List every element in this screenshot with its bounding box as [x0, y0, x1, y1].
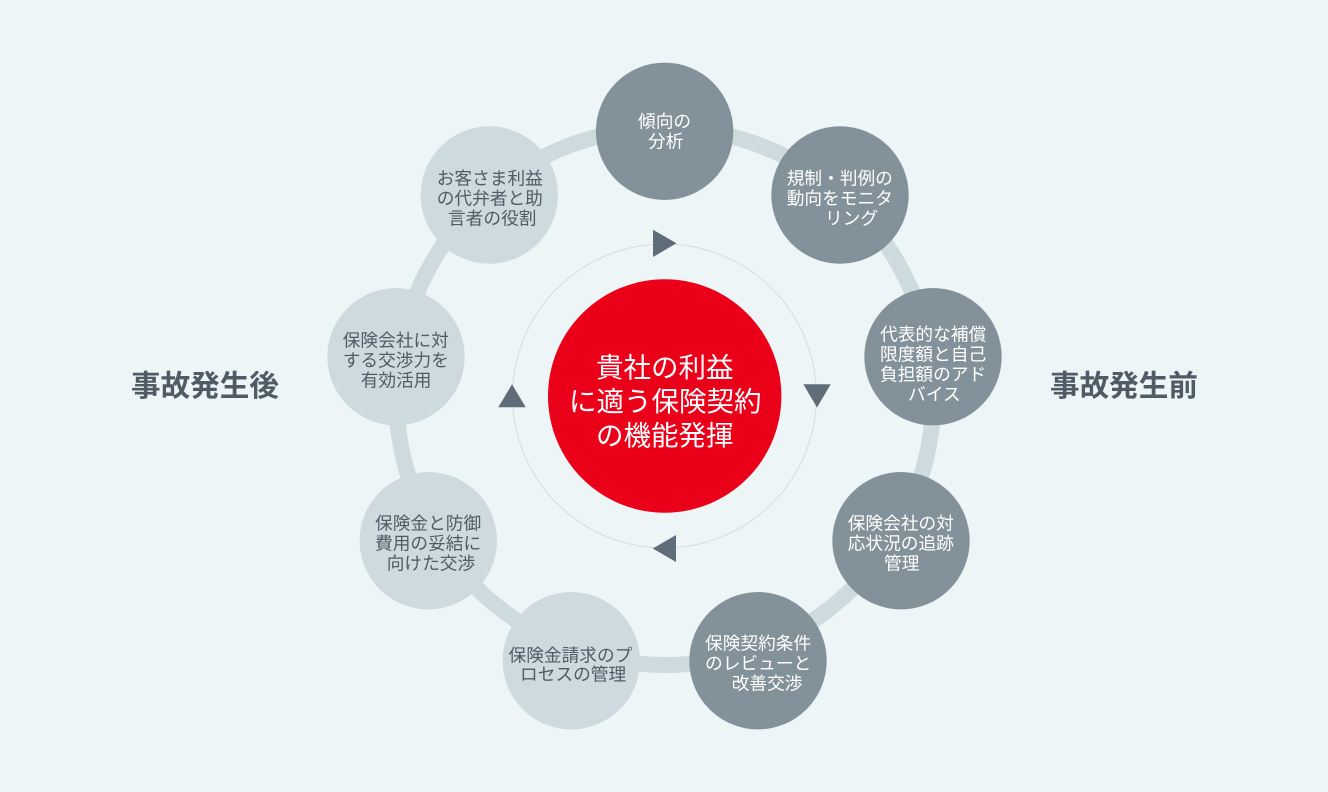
step: insurer response tracking — [832, 472, 970, 609]
outer ring connecting steps — [396, 128, 933, 665]
step: claim process management — [503, 592, 640, 729]
center circle: の機能発揮 — [596, 420, 734, 451]
step: regulation monitoring: リング — [825, 208, 878, 228]
label: after accident: 事故発生後 — [131, 370, 279, 403]
center circle: 貴社の利益 — [596, 352, 734, 383]
step: limit advice: 代表的な補償 — [880, 324, 986, 344]
step: contract review — [689, 592, 827, 729]
step: client advocate: お客さま利益 — [437, 168, 543, 188]
step: claim process management: 保険金請求のプ — [508, 646, 633, 666]
step: settlement negotiation — [360, 472, 497, 609]
center circle: に適う保険契約 — [569, 386, 762, 417]
step: negotiating power: する交渉力を — [343, 350, 449, 370]
step: regulation monitoring — [771, 126, 909, 264]
arrow: top — [653, 230, 676, 257]
step: negotiating power: 有効活用 — [361, 370, 431, 390]
step: limit advice — [864, 288, 1002, 425]
step: negotiating power: 保険会社に対 — [343, 330, 449, 350]
label: before accident: 事故発生前 — [1050, 370, 1198, 403]
step: regulation monitoring: 規制・判例の — [787, 168, 893, 188]
arrow: left — [498, 384, 526, 407]
step: insurer response tracking: 応状況の追跡 — [848, 534, 954, 554]
step: settlement negotiation: 向けた交渉 — [387, 554, 475, 574]
step: claim process management: ロセスの管理 — [520, 664, 626, 684]
step: insurer response tracking: 管理 — [884, 554, 920, 574]
step: settlement negotiation: 保険金と防御 — [375, 514, 481, 534]
step: regulation monitoring: 動向をモニタ — [787, 188, 893, 208]
center circle — [548, 279, 781, 513]
step: trend analysis: 傾向の — [638, 112, 691, 132]
step: client advocate: 言者の役割 — [448, 208, 536, 228]
step: negotiating power — [327, 288, 465, 425]
step: trend analysis: 分析 — [648, 132, 683, 152]
step: client advocate: の代弁者と助 — [437, 188, 543, 208]
step: client advocate — [421, 126, 558, 264]
step: limit advice: 限度額と自己 — [880, 344, 986, 364]
step: contract review: 改善交渉 — [732, 674, 803, 694]
step: contract review: のレビューと — [705, 654, 811, 674]
step: contract review: 保険契約条件 — [705, 634, 811, 654]
step: insurer response tracking: 保険会社の対 — [848, 514, 954, 534]
arrow: right — [803, 384, 831, 408]
inner cycle ring — [512, 244, 816, 548]
step: settlement negotiation: 費用の妥結に — [375, 534, 481, 554]
step: limit advice: バイス — [908, 384, 961, 404]
step: trend analysis — [596, 63, 733, 200]
arrow: bottom — [653, 535, 676, 562]
step: limit advice: 負担額のアド — [880, 364, 986, 384]
